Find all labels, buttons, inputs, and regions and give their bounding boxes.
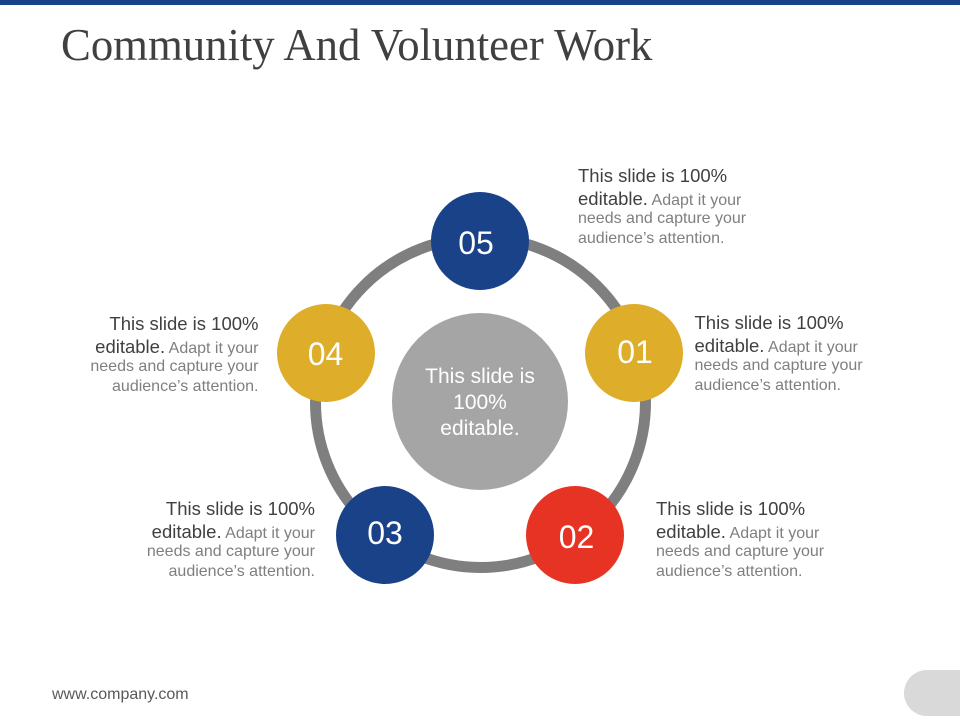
page tab (904, 670, 960, 716)
text 02: audience’s attention. (656, 563, 802, 580)
text 05: This slide is 100% (578, 165, 727, 186)
text 05: audience’s attention. (578, 230, 724, 247)
node 03 (336, 486, 434, 584)
text 04: editable. Adapt it your (95, 336, 258, 357)
text 01: This slide is 100% (694, 312, 844, 333)
text 02 (656, 498, 824, 580)
text 01 (694, 312, 863, 394)
footer url: www.company.com (52, 686, 189, 703)
text 04 (90, 313, 258, 395)
node 02 (526, 486, 624, 584)
node 05: 05 (458, 225, 494, 261)
text 04: audience’s attention. (112, 378, 258, 395)
text 03: This slide is 100% (166, 498, 315, 519)
node 03: 03 (367, 515, 403, 551)
title: Community And Volunteer Work (61, 19, 652, 70)
node 05 (431, 192, 529, 290)
center circle: This slide is (425, 365, 535, 388)
text 03: needs and capture your (147, 543, 315, 560)
top bar (0, 0, 960, 5)
text 03: editable. Adapt it your (152, 521, 315, 542)
node 04 (277, 304, 375, 402)
text 03: audience’s attention. (169, 563, 315, 580)
text 04: This slide is 100% (109, 313, 258, 334)
text 03 (147, 498, 315, 580)
text 05 (578, 165, 746, 247)
node 04: 04 (308, 336, 343, 372)
text 02: This slide is 100% (656, 498, 805, 519)
center circle: 100% (453, 391, 507, 414)
node 02: 02 (559, 519, 594, 555)
text 01: audience’s attention. (694, 377, 841, 394)
center circle (392, 313, 568, 490)
ring (310, 239, 651, 573)
text 04: needs and capture your (90, 358, 258, 375)
center circle: editable. (440, 417, 520, 440)
text 01: needs and capture your (694, 357, 863, 374)
text 05: needs and capture your (578, 210, 746, 227)
text 02: needs and capture your (656, 543, 824, 560)
text 02: editable. Adapt it your (656, 521, 819, 542)
node 01 (585, 304, 683, 402)
node 01: 01 (617, 334, 653, 370)
text 05: editable. Adapt it your (578, 188, 741, 209)
text 01: editable. Adapt it your (694, 335, 858, 356)
